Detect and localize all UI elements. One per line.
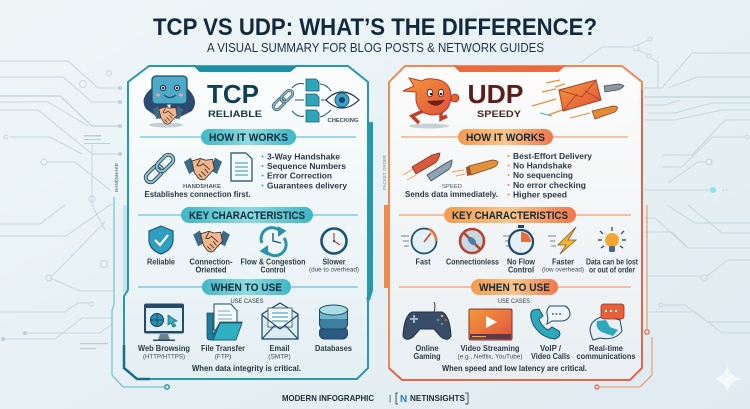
icon: stopwatch [503, 225, 533, 254]
section: key characteristics: KEY CHARACTERISTICS [189, 210, 305, 222]
TCP name: TCP [207, 81, 259, 109]
UDP bullet list [508, 151, 592, 200]
characteristics labels: Control [260, 266, 286, 274]
icon: database [320, 305, 348, 339]
icon: gamepad [403, 302, 451, 339]
characteristics labels: Faster [552, 258, 574, 266]
UDP bullet list: No error checking [513, 180, 586, 190]
UDP side node [645, 330, 649, 334]
footer credit: N [400, 394, 407, 405]
speed caption: SPEED [442, 184, 462, 190]
circuit lines right [580, 37, 750, 333]
UDP summary: Sends data immediately. [405, 189, 498, 199]
characteristics labels: Reliable [147, 258, 175, 266]
icon: lightbulb [598, 227, 626, 252]
section: key characteristics [399, 207, 631, 223]
checking label: CHECKING [328, 118, 358, 124]
TCP top accent [195, 66, 296, 71]
side label: packet order: PACKET ORDER [382, 154, 387, 190]
use cases caption: USE CASES [230, 299, 264, 305]
UDP footer note: When speed and low latency are critical. [442, 363, 587, 373]
TCP left band [123, 205, 127, 292]
section: how it works: HOW IT WORKS [466, 132, 545, 144]
characteristics labels [416, 258, 638, 274]
TCP footer note: When data integrity is critical. [192, 363, 301, 373]
TCP bullet list: Sequence Numbers [267, 161, 346, 171]
use case labels: Email [270, 344, 290, 353]
icon: phone [531, 306, 570, 339]
use case labels: Web Browsing [138, 344, 190, 353]
use case labels: Gaming [414, 352, 441, 361]
TCP node [165, 385, 169, 389]
TCP lower-left accent [124, 345, 150, 379]
characteristics labels: Control [508, 266, 534, 274]
icon: clock [322, 228, 346, 254]
icon: flying envelope and bullets [532, 80, 624, 119]
TCP tagline: RELIABLE [208, 109, 262, 120]
section: key characteristics: KEY CHARACTERISTICS [452, 210, 568, 222]
section: when to use [138, 279, 358, 295]
characteristics labels: or out of order [589, 266, 635, 274]
UDP tagline: SPEEDY [477, 109, 522, 120]
panel: UDP [386, 66, 652, 389]
section: when to use: WHEN TO USE [479, 282, 550, 294]
use case labels: (FTP) [215, 354, 231, 360]
UDP top accent [455, 66, 564, 71]
section: how it works [401, 129, 628, 145]
circuit accent node right [710, 187, 728, 193]
icon: shield [149, 226, 173, 254]
icon: video player [469, 309, 512, 340]
use case labels: Video Calls [531, 352, 570, 361]
section: how it works [140, 129, 356, 145]
TCP right edge accent [368, 122, 371, 300]
TCP outer accent frame [112, 197, 164, 387]
characteristics labels: Flow & Congestion [240, 258, 306, 266]
circuit lines left [0, 61, 120, 339]
UDP right edge accent [389, 90, 642, 380]
icon: flow cycle [261, 227, 286, 256]
icon: gauge [401, 228, 436, 254]
TCP panel body [124, 66, 368, 379]
icon: envelope [262, 303, 298, 339]
use case labels: (HTTP/HTTPS) [143, 354, 185, 360]
footer credit: | [389, 393, 391, 403]
title: TCP VS UDP: WHAT’S THE DIFFERENCE? [153, 14, 597, 41]
use case labels: (e.g., Netflix, YouTube) [458, 354, 522, 360]
use case labels [138, 344, 353, 360]
TCP bullet list [262, 152, 347, 190]
bullets icons [403, 153, 498, 181]
UDP bullet list: No sequencing [513, 170, 573, 180]
use case labels [414, 344, 636, 361]
TCP checking diagram [272, 79, 359, 124]
circuit nodes left [1, 86, 122, 349]
icon: bolt [548, 227, 576, 254]
UDP bullet list: No Handshake [513, 160, 572, 170]
section: key characteristics [138, 207, 358, 223]
UDP panel body [389, 66, 642, 380]
use case labels: File Transfer [201, 344, 245, 353]
UDP name: UDP [468, 81, 524, 109]
section: when to use: WHEN TO USE [211, 282, 282, 294]
characteristics labels [147, 258, 359, 274]
side label: no delays: NO DELAYS [625, 165, 630, 190]
use case labels: Real-time [589, 344, 624, 353]
use case labels: communications [576, 352, 636, 361]
subtitle: A VISUAL SUMMARY FOR BLOG POSTS & NETWORK GUIDES [207, 41, 544, 55]
characteristics labels: Connection- [190, 258, 233, 266]
use case labels: Databases [315, 344, 353, 353]
use case labels: VoIP / [540, 344, 562, 353]
characteristics labels: Slower [322, 258, 346, 266]
TCP bullet list: Guarantees delivery [267, 180, 347, 190]
handshake caption: HANDSHAKE [183, 184, 221, 190]
footer credit [282, 393, 468, 405]
UDP bullet list: Best-Effort Delivery [513, 151, 592, 161]
icon: folder [207, 304, 242, 340]
characteristics labels: Data can be lost [586, 258, 638, 266]
characteristics labels: Oriented [196, 266, 227, 274]
footer credit: MODERN INFOGRAPHIC [282, 393, 374, 403]
characteristics labels: (due to overhead) [309, 266, 359, 274]
characteristics labels: (low overhead) [542, 266, 584, 274]
UDP left band [384, 205, 388, 288]
section: how it works: HOW IT WORKS [209, 132, 288, 144]
TCP mascot [144, 76, 195, 128]
use cases caption: USE CASES [498, 299, 530, 305]
icon: realtime chat [590, 304, 624, 340]
icon: handshake [193, 230, 230, 252]
section: when to use [399, 279, 631, 295]
characteristics labels: No Flow [507, 258, 536, 266]
sparkle decoration [714, 366, 741, 392]
footer credit: NETINSIGHTS [410, 393, 465, 403]
TCP summary: Establishes connection first. [144, 189, 250, 199]
icon: no connection [460, 229, 484, 253]
UDP mascot [403, 78, 459, 128]
use case labels: Video Streaming [460, 344, 520, 353]
side label: handshake: HANDSHAKE [114, 163, 119, 192]
TCP bullet list: 3-Way Handshake [267, 152, 340, 162]
UDP outer accent frame [600, 205, 652, 387]
use case labels: (SMTP) [268, 354, 291, 360]
characteristics labels: Fast [416, 258, 431, 266]
TCP how icons [144, 153, 252, 184]
TCP bullet list: Error Correction [267, 170, 332, 180]
use case labels: Online [416, 344, 439, 353]
UDP bullet list: Higher speed [513, 190, 567, 200]
panel: TCP [112, 66, 371, 389]
icon: browser [144, 304, 184, 341]
characteristics labels: Connectionless [446, 258, 499, 266]
UDP node [595, 385, 599, 389]
